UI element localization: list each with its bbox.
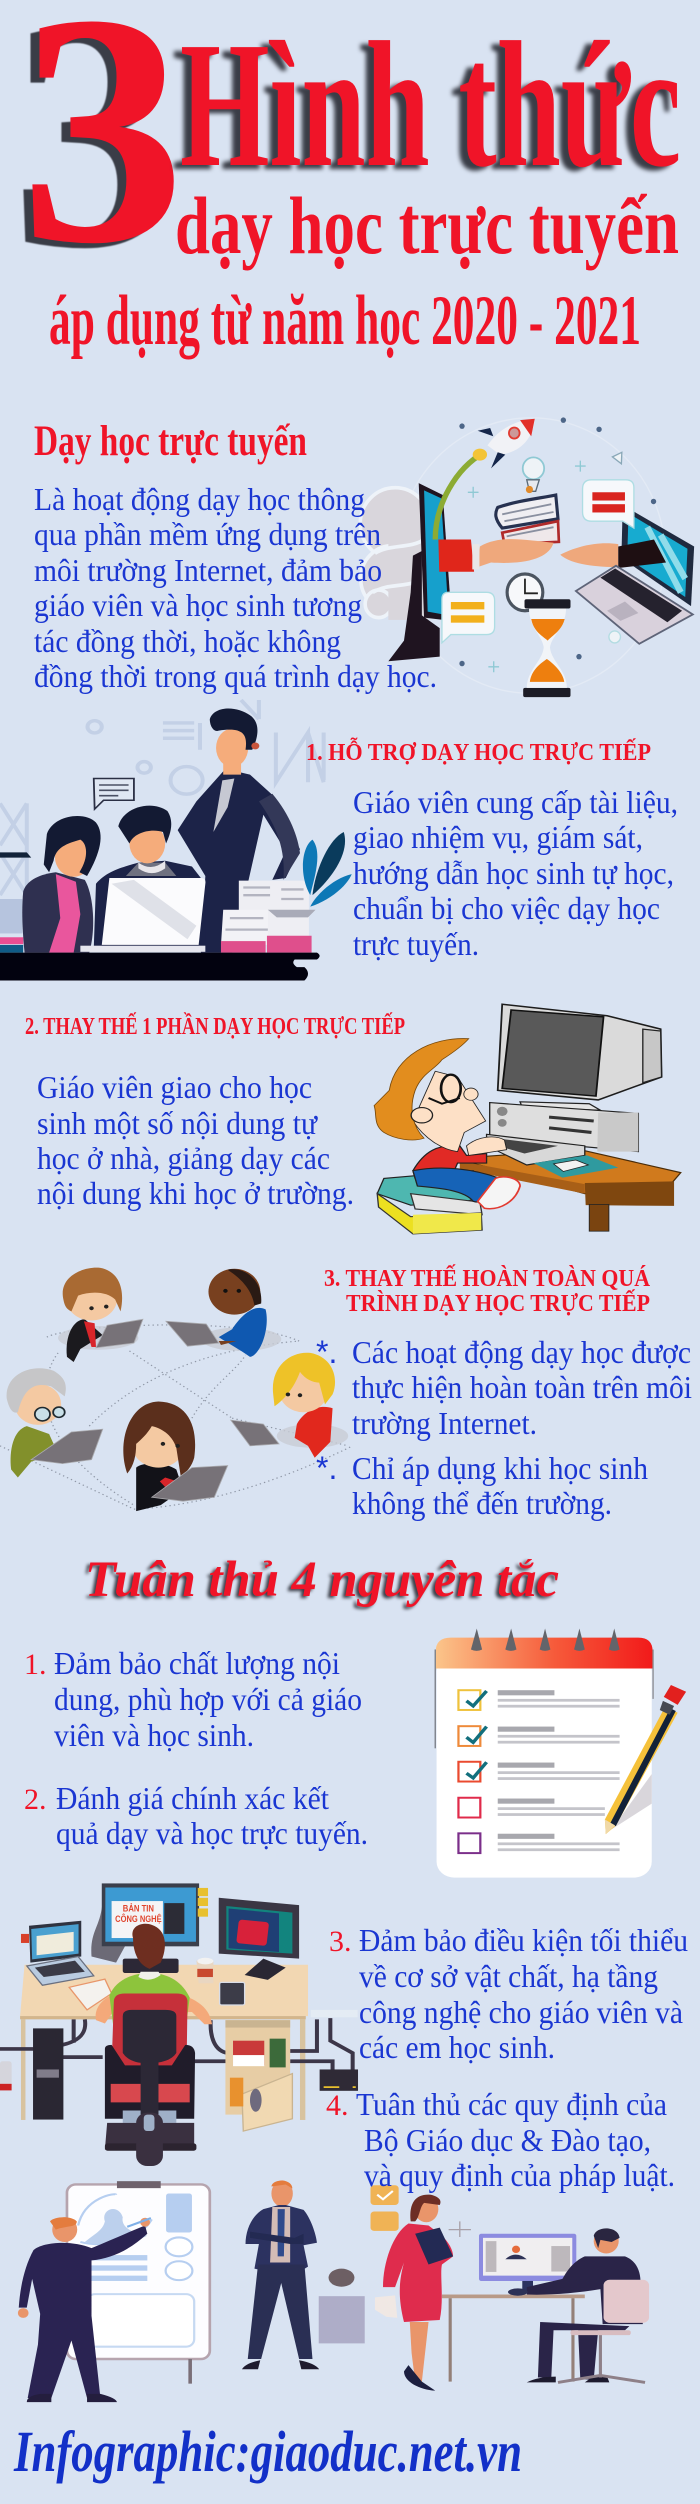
laptop xyxy=(102,878,205,945)
principle 2 xyxy=(24,1780,368,1851)
principle 2: quả dạy và học trực tuyến. xyxy=(56,1815,368,1851)
text block: form 1: trực tuyến. xyxy=(353,926,479,962)
text block: form 3 xyxy=(316,1334,692,1521)
student yellow hair xyxy=(295,1407,333,1458)
text block: definition: qua phần mềm ứng dụng trên xyxy=(34,516,381,552)
standing man xyxy=(178,769,300,953)
leaves xyxy=(303,840,317,895)
text block: form 3: Chỉ áp dụng khi học sinh xyxy=(352,1450,648,1486)
principle 1: Đảm bảo chất lượng nội xyxy=(54,1645,340,1681)
text block: form 3: không thể đến trường. xyxy=(352,1485,612,1521)
principle 2: 2. xyxy=(24,1783,46,1816)
principle 3: các em học sinh. xyxy=(359,2029,555,2065)
principle 4 xyxy=(326,2086,675,2193)
heading: four principles: Tuân thủ 4 nguyên tắc xyxy=(85,1552,559,1608)
heading: form 3: 3. THAY THẾ HOÀN TOÀN QUÁ xyxy=(324,1265,651,1292)
woman in red dress xyxy=(414,2196,438,2222)
student top left xyxy=(67,1319,103,1362)
student top right xyxy=(219,1308,267,1357)
desk and computer xyxy=(442,2295,585,2298)
man at laptop xyxy=(94,861,205,949)
heading: form 3 xyxy=(324,1265,651,1317)
text block: form 3: *. xyxy=(316,1334,337,1370)
principle 1: 1. xyxy=(24,1648,46,1681)
text block: form 2 xyxy=(37,1069,354,1211)
illustration: business people with whiteboard and computer xyxy=(18,2180,649,2402)
student center girl xyxy=(136,1463,183,1511)
man standing, arms crossed xyxy=(271,2180,293,2207)
text block: form 2: nội dung khi học ở trường. xyxy=(37,1175,354,1211)
paper stacks xyxy=(239,881,309,945)
principle 4: và quy định của pháp luật. xyxy=(364,2157,675,2193)
seated man xyxy=(594,2229,619,2253)
text block: definition: tác đồng thời, hoặc không xyxy=(34,623,341,659)
side table with round object xyxy=(319,2296,365,2343)
illustration: online teaching with monitor, hands, laptop, rocket xyxy=(360,417,694,697)
footer: source credit: Infographic:giaoduc.net.vn xyxy=(13,2419,522,2484)
text block: definition: môi trường Internet, đảm bảo xyxy=(34,552,382,588)
principle 1: viên và học sinh. xyxy=(54,1717,254,1753)
principle 1 xyxy=(24,1645,362,1753)
illustration: cartoon boy at desktop computer xyxy=(374,1004,681,1234)
text block: form 1: hướng dẫn học sinh tự học, xyxy=(353,855,674,891)
heading: form 2: 2. THAY THẾ 1 PHẦN DẠY HỌC TRỰC TIẾP xyxy=(25,1013,405,1040)
text block: form 1: giao nhiệm vụ, giám sát, xyxy=(353,819,643,855)
text block: definition: giáo viên và học sinh tương xyxy=(34,587,362,623)
text block: form 1 xyxy=(353,784,678,962)
desk xyxy=(0,953,320,981)
principle 3: 3. xyxy=(329,1925,352,1958)
principle 4: 4. xyxy=(326,2089,348,2122)
principle 3: công nghệ cho giáo viên và xyxy=(359,1994,683,2030)
text block: form 2: học ở nhà, giảng dạy các xyxy=(37,1140,330,1176)
man drawing on board xyxy=(52,2217,77,2242)
text block: form 2: sinh một số nội dung tự xyxy=(37,1105,319,1141)
heading: definition: Dạy học trực tuyến xyxy=(34,418,307,465)
illustration: person at desk with three screens: BẢN TIN xyxy=(123,1903,154,1914)
woman xyxy=(22,872,93,953)
text block: definition: đồng thời trong quá trình dạy học. xyxy=(34,658,437,694)
illustration: person at desk with three screens: CÔNG NGHỆ xyxy=(115,1913,162,1924)
text block: form 1: chuẩn bị cho việc dạy học xyxy=(353,890,660,926)
text block: form 3: *. xyxy=(316,1450,337,1486)
principle 3: về cơ sở vật chất, hạ tầng xyxy=(359,1958,658,1994)
text block: form 3: trường Internet. xyxy=(352,1405,537,1441)
principle 4: Bộ Giáo dục & Đào tạo, xyxy=(364,2122,651,2158)
principle 1: dung, phù hợp với cả giáo xyxy=(54,1681,362,1717)
principle 2: Đánh giá chính xác kết xyxy=(56,1780,329,1816)
student grandmother xyxy=(11,1426,58,1477)
text block: form 2: Giáo viên giao cho học xyxy=(37,1069,312,1105)
text block: definition: Là hoạt động dạy học thông xyxy=(34,481,365,517)
illustration: five students with laptops connected online xyxy=(0,1268,353,1511)
principle 4: Tuân thủ các quy định của xyxy=(356,2086,667,2122)
heading: form 1: 1. HỖ TRỢ DẠY HỌC TRỰC TIẾP xyxy=(306,738,651,766)
illustration: checklist notepad with pencil xyxy=(435,1629,686,1878)
illustration: teacher and two students at a laptop xyxy=(0,700,352,981)
text block: definition xyxy=(34,481,437,694)
text block: form 1: Giáo viên cung cấp tài liệu, xyxy=(353,784,678,820)
principle 3 xyxy=(329,1922,688,2065)
illustration: person at desk with three screens xyxy=(0,1883,358,2166)
heading: form 3: TRÌNH DẠY HỌC TRỰC TIẾP xyxy=(346,1290,650,1317)
